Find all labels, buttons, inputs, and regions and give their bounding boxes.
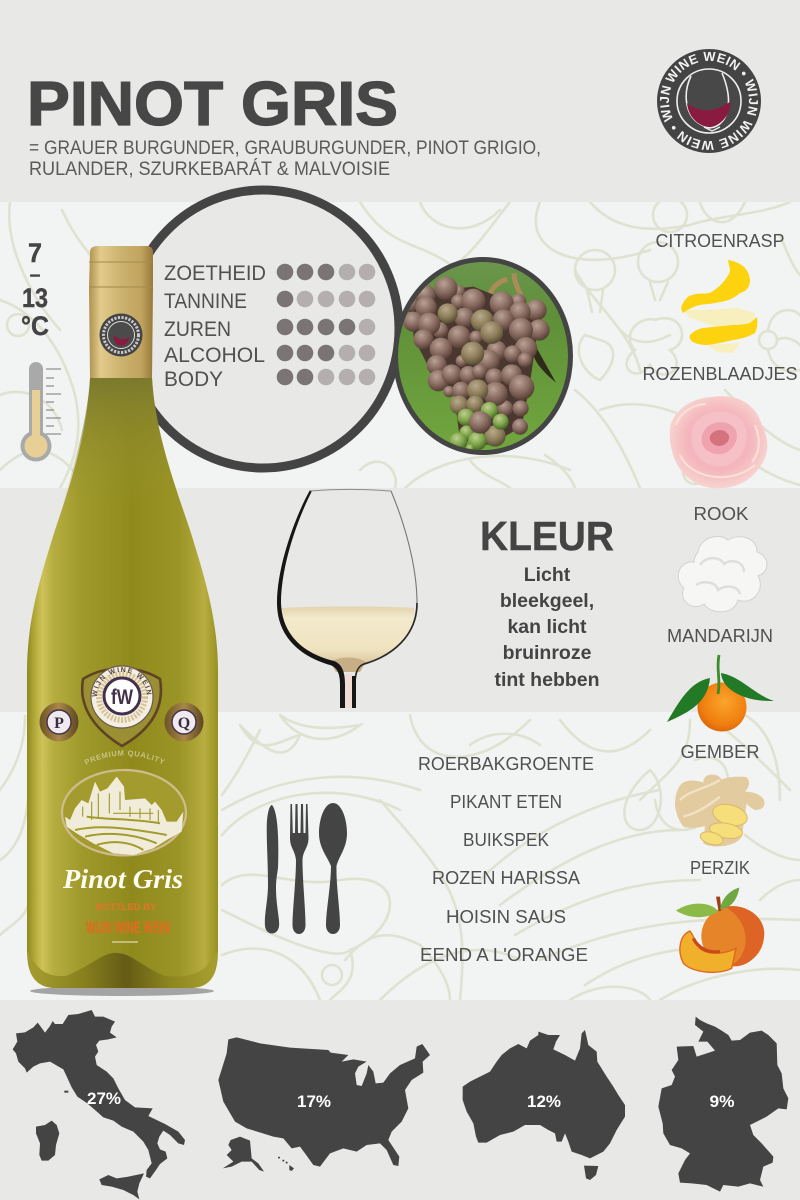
fork bbox=[290, 804, 308, 934]
taste labels: ZUREN bbox=[164, 318, 231, 341]
logo: wijn wine wein seal: WINE WEIN • WIJN WINE WEIN • WIJN bbox=[660, 52, 758, 150]
food pairings list: PIKANT ETEN bbox=[450, 792, 562, 812]
map: USA 17%: 17% bbox=[297, 1092, 331, 1111]
aroma labels: CITROENRASP bbox=[656, 231, 784, 251]
food pairings list: ROZEN HARISSA bbox=[432, 868, 580, 888]
subtitle: synonyms: = GRAUER BURGUNDER, GRAUBURGUNDER, PINOT GRIGIO, bbox=[29, 138, 541, 159]
text: colour description: bleekgeel, bbox=[500, 590, 594, 612]
food pairings list: BUIKSPEK bbox=[463, 830, 549, 850]
map: Italy 27%: 27% bbox=[87, 1090, 121, 1108]
temperature range: 7 bbox=[28, 238, 42, 268]
food pairings list: ROERBAKGROENTE bbox=[418, 754, 594, 774]
aroma labels bbox=[642, 231, 798, 878]
panel: floral band lower bbox=[0, 712, 800, 1000]
icon: ginger bbox=[675, 775, 764, 847]
icon: wine glass bbox=[277, 490, 420, 708]
map: Australia 12%: 12% bbox=[527, 1092, 561, 1111]
taste labels: TANNINE bbox=[164, 290, 247, 313]
panel: header band bbox=[0, 0, 800, 202]
label badge P bbox=[40, 702, 78, 742]
taste labels: ALCOHOL bbox=[164, 344, 265, 367]
label badge P: P bbox=[54, 715, 64, 732]
label crest: WIJN WINE WEIN bbox=[92, 667, 152, 696]
text: colour description: tint hebben bbox=[494, 669, 600, 691]
taste labels bbox=[164, 262, 266, 391]
label crest: fW bbox=[111, 686, 133, 709]
text: colour description bbox=[494, 564, 600, 691]
icon: rose bbox=[670, 396, 767, 488]
subtitle: synonyms: RULANDER, SZURKEBARÁT & MALVOISIE bbox=[29, 159, 390, 180]
map: USA 17% bbox=[218, 1037, 430, 1172]
temperature range: °C bbox=[21, 311, 49, 341]
icon: cutlery bbox=[265, 803, 347, 934]
taste rating dots bbox=[277, 264, 375, 385]
sticker on neck bbox=[100, 314, 142, 356]
heading: kleur: KLEUR bbox=[480, 513, 614, 559]
label: wine name: Pinot Gris bbox=[62, 864, 183, 894]
label crest bbox=[80, 665, 162, 748]
temperature range: 13 bbox=[22, 283, 48, 313]
label: premium quality: PREMIUM QUALITY bbox=[84, 750, 165, 765]
label: producer: WIJN WINE WEIN bbox=[86, 918, 170, 937]
panel: colour band background bbox=[0, 488, 800, 712]
aroma labels: GEMBER bbox=[680, 742, 760, 762]
text: colour description: Licht bbox=[524, 564, 571, 586]
icon: thermometer bbox=[20, 362, 61, 462]
food pairings list: HOISIN SAUS bbox=[446, 907, 566, 927]
label badge Q: Q bbox=[178, 715, 190, 732]
temperature range bbox=[21, 238, 49, 341]
panel: taste profile circle bbox=[127, 190, 399, 468]
title: PINOT GRIS bbox=[27, 70, 398, 139]
food pairings list bbox=[418, 754, 594, 965]
icon: lemon zest bbox=[681, 260, 757, 353]
label badge Q bbox=[164, 702, 204, 742]
aroma labels: ROZENBLAADJES bbox=[642, 364, 798, 384]
aroma labels: ROOK bbox=[694, 504, 748, 524]
icon: smoke cloud bbox=[678, 536, 767, 612]
bottle capsule bbox=[89, 246, 153, 378]
panel: floral band upper bbox=[0, 198, 800, 488]
bottle bbox=[27, 246, 218, 996]
text: colour description: bruinroze bbox=[503, 642, 592, 664]
spoon bbox=[319, 803, 347, 934]
temperature range: – bbox=[30, 265, 40, 286]
aroma labels: PERZIK bbox=[690, 858, 750, 878]
grape photo circle bbox=[390, 255, 580, 460]
map: Australia 12% bbox=[463, 1030, 625, 1180]
map: Germany 9% bbox=[658, 1017, 788, 1192]
bottle body bbox=[27, 378, 218, 988]
label: bottled by: BOTTLED BY bbox=[96, 902, 157, 913]
map: Italy 27% bbox=[13, 1010, 185, 1199]
icon: peach bbox=[676, 888, 764, 972]
icon: mandarin bbox=[667, 655, 774, 732]
aroma labels: MANDARIJN bbox=[667, 626, 773, 646]
text: colour description: kan licht bbox=[507, 616, 587, 638]
taste labels: ZOETHEID bbox=[164, 262, 266, 285]
food pairings list: EEND A L'ORANGE bbox=[420, 945, 588, 965]
knife bbox=[265, 805, 279, 934]
label: vineyard vignette bbox=[62, 770, 186, 855]
taste labels: BODY bbox=[164, 368, 223, 391]
subtitle: synonyms bbox=[29, 138, 541, 180]
map: Germany 9%: 9% bbox=[710, 1092, 734, 1111]
